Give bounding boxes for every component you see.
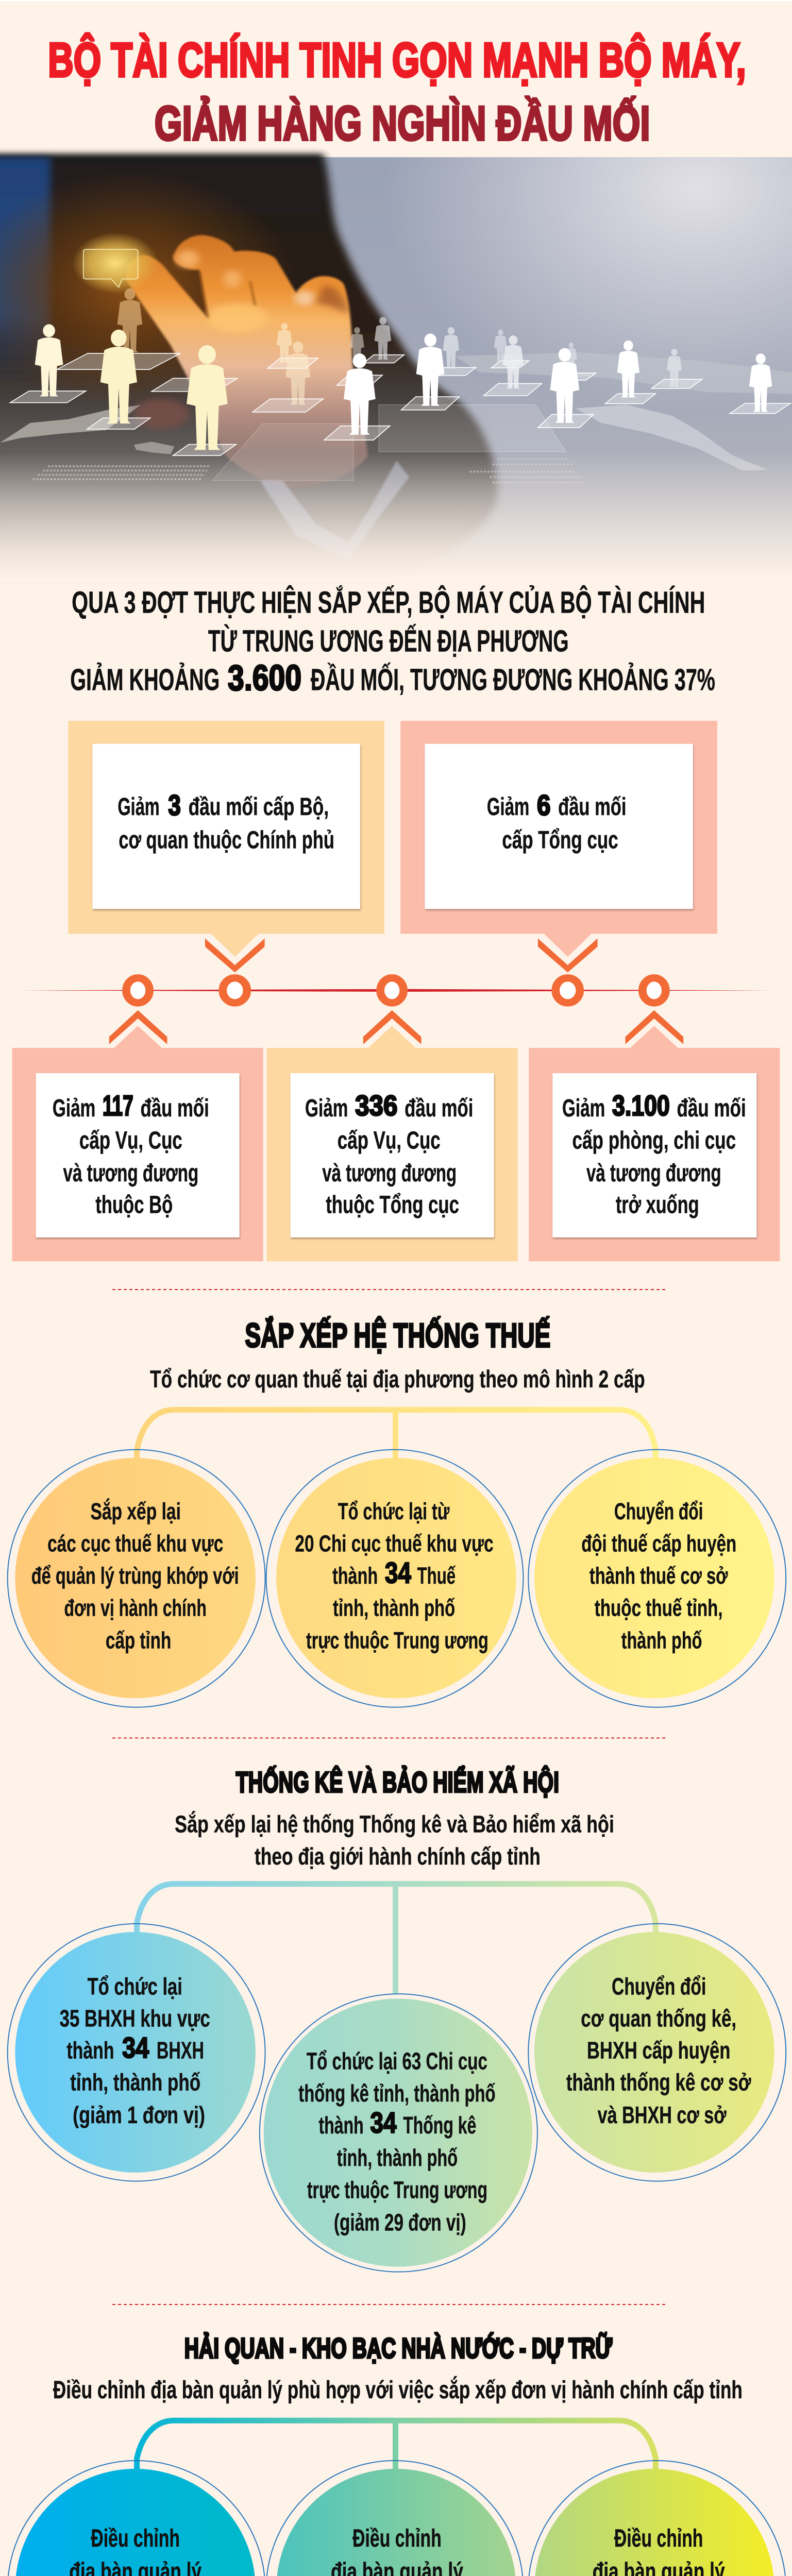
circle: 63 statistics sub-departments: tỉnh, thành phố xyxy=(337,2145,458,2171)
circle: reorganize 20 sub-departments: Tổ chức lại từ xyxy=(338,1498,450,1524)
circle: convert district statistics agencies: Chuyển đổi xyxy=(612,1974,706,2000)
panel: 117 units: thuộc Bộ xyxy=(95,1191,173,1218)
circle: 35 social insurance units: 35 BHXH khu vực xyxy=(60,2006,210,2032)
panel: general department level: cấp Tổng cục xyxy=(502,826,618,854)
chevrons pointing to timeline xyxy=(109,938,683,1044)
thumb shadow xyxy=(134,399,190,429)
panel: general department level: đầu mối xyxy=(558,792,626,821)
panel: ministry level xyxy=(68,721,384,957)
panel: 117 units: 117 xyxy=(103,1090,133,1122)
platform tiles xyxy=(10,353,790,455)
circle: reorganize 20 sub-departments xyxy=(266,1450,523,1707)
panel: 117 units: đầu mối xyxy=(140,1094,209,1122)
circle: rearrange tax departments xyxy=(8,1450,265,1707)
circle: convert district tax teams: thành phố xyxy=(621,1627,702,1653)
panel: 336 units: Giảm xyxy=(305,1094,348,1122)
connector xyxy=(137,2420,655,2470)
circle: 63 statistics sub-departments: thành xyxy=(319,2112,364,2139)
subheading: theo địa giới hành chính cấp tỉnh xyxy=(255,1843,541,1870)
circle: 63 statistics sub-departments: thống kê tỉnh, thành phố xyxy=(298,2080,496,2107)
circle: reorganize 20 sub-departments: thành xyxy=(332,1563,378,1589)
circle: 35 social insurance units: Tổ chức lại xyxy=(88,1974,182,2000)
hand xyxy=(126,235,368,487)
panel: 3.100 units xyxy=(529,1026,780,1261)
circle: 63 statistics sub-departments: Tổ chức lại 63 Chi cục xyxy=(307,2048,487,2075)
circle: reorganize 20 sub-departments: tỉnh, thành phố xyxy=(333,1595,455,1621)
panel: 3.100 units: Giảm xyxy=(562,1094,605,1122)
circle: 35 social insurance units: thành xyxy=(66,2038,114,2064)
panel: 336 units: thuộc Tổng cục xyxy=(326,1191,459,1218)
circle: reorganize 20 sub-departments: trực thuộc Trung ương xyxy=(306,1627,488,1653)
circle: reorganize 20 sub-departments: 20 Chi cục thuế khu vực xyxy=(295,1530,494,1556)
circle: 35 social insurance units: (giảm 1 đơn vị) xyxy=(73,2102,205,2129)
summary section: reductions timeline xyxy=(12,586,780,1261)
circle: 35 social insurance units: 34 xyxy=(122,2031,149,2064)
panel: 117 units xyxy=(12,1026,263,1261)
panel: 336 units: đầu mối xyxy=(405,1094,473,1122)
circle: convert district tax teams xyxy=(528,1450,786,1707)
circle: 63 statistics sub-departments: 34 xyxy=(370,2106,396,2139)
circle: 63 statistics sub-departments: (giảm 29 đơn vị) xyxy=(334,2209,466,2236)
panel: 117 units: cấp Vụ, Cục xyxy=(79,1126,182,1154)
panel: general department level: 6 xyxy=(537,790,550,822)
intro text: TỪ TRUNG ƯƠNG ĐẾN ĐỊA PHƯƠNG xyxy=(208,624,569,658)
panel: ministry level: 3 xyxy=(168,790,181,822)
section: customs, treasury, reserves xyxy=(8,2332,786,2576)
panel: 117 units: và tương đương xyxy=(63,1159,198,1187)
circle: 16 state treasury offices: Điều chỉnh xyxy=(614,2524,703,2552)
circle: 63 statistics sub-departments xyxy=(260,1994,537,2272)
panel: general department level: Giảm xyxy=(487,792,529,821)
circle: 35 social insurance units: tỉnh, thành phố xyxy=(70,2070,200,2096)
section: tax system xyxy=(8,1316,786,1707)
circle: rearrange tax departments: cấp tỉnh xyxy=(106,1627,171,1653)
circle: 12 state reserve sub-departments: Điều chỉnh xyxy=(352,2524,442,2552)
panel: ministry level: đầu mối cấp Bộ, xyxy=(189,792,329,821)
circle: reorganize 20 sub-departments: 34 xyxy=(385,1556,411,1589)
circle: 35 social insurance units: BHXH xyxy=(157,2038,204,2064)
binary text texture xyxy=(33,459,583,483)
intro text: 3.600 xyxy=(228,658,301,698)
panel: ministry level: cơ quan thuộc Chính phủ xyxy=(119,826,334,854)
panel: 3.100 units: trở xuống xyxy=(616,1191,699,1218)
subheading xyxy=(175,1811,614,1870)
panel: 3.100 units: 3.100 xyxy=(612,1090,670,1122)
panel: 3.100 units: đầu mối xyxy=(677,1094,746,1122)
panel: 336 units: 336 xyxy=(355,1090,397,1122)
circle: 63 statistics sub-departments: Thống kê xyxy=(403,2112,476,2139)
circle: rearrange tax departments: các cục thuế khu vực xyxy=(47,1530,223,1556)
intro text xyxy=(70,586,715,698)
circle: 17 customs sub-departments: Điều chỉnh xyxy=(91,2524,180,2552)
circle: 12 state reserve sub-departments xyxy=(266,2461,523,2576)
circle: convert district tax teams: Chuyển đổi xyxy=(614,1498,703,1524)
circle: 17 customs sub-departments xyxy=(8,2461,265,2576)
panel: ministry level: Giảm xyxy=(117,792,160,821)
section: statistics and social insurance xyxy=(8,1766,786,2272)
circle: reorganize 20 sub-departments: Thuế xyxy=(417,1563,456,1589)
circle: 16 state treasury offices xyxy=(528,2461,786,2576)
panel: 336 units xyxy=(267,1026,518,1261)
timeline xyxy=(21,938,770,1044)
panel: 336 units: và tương đương xyxy=(322,1159,457,1187)
timeline nodes xyxy=(126,978,666,1003)
circle: rearrange tax departments: để quản lý trùng khớp với xyxy=(31,1563,239,1589)
connector xyxy=(137,1884,655,2000)
circle: 35 social insurance units xyxy=(8,1924,265,2181)
panel: general department level xyxy=(400,721,717,957)
circle: rearrange tax departments: Sắp xếp lại xyxy=(90,1498,181,1524)
connector xyxy=(137,1410,655,1460)
panel: 117 units: Giảm xyxy=(53,1094,95,1122)
circle: rearrange tax departments: đơn vị hành chính xyxy=(64,1595,207,1621)
intro text: GIẢM KHOẢNG xyxy=(70,663,220,697)
circle: convert district statistics agencies xyxy=(528,1924,786,2181)
panel: 336 units: cấp Vụ, Cục xyxy=(338,1126,441,1154)
circle: 63 statistics sub-departments: trực thuộc Trung ương xyxy=(307,2177,487,2204)
people silhouettes xyxy=(35,289,772,450)
hero photo: hand touching network of people xyxy=(0,154,792,583)
speech bubble icon xyxy=(69,230,162,296)
header: title and photo xyxy=(0,33,792,583)
